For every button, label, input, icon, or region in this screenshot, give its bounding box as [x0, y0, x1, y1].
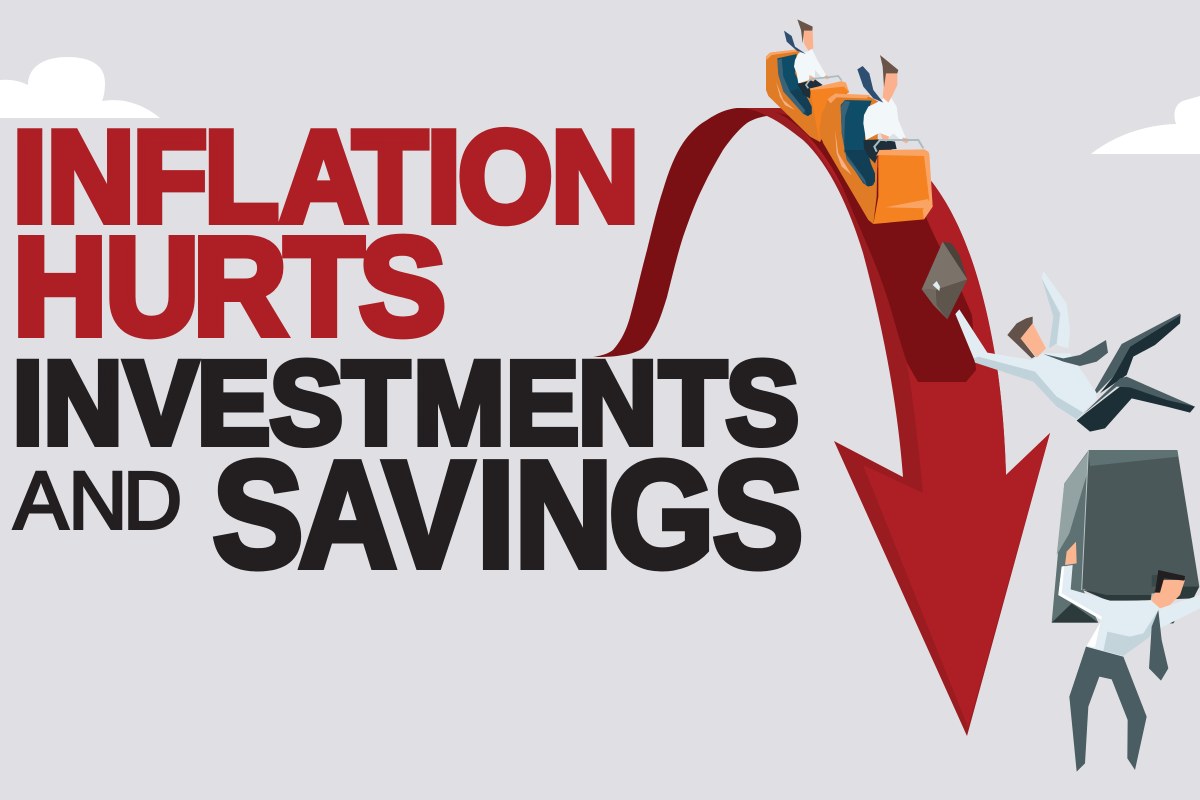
title line: INVESTMENTS: INVESTMENTS — [13, 338, 799, 469]
back car — [766, 49, 848, 142]
icon: briefcase — [922, 242, 967, 319]
title — [13, 105, 803, 599]
arrow bright face — [780, 108, 1050, 727]
arrow base shade — [737, 108, 1050, 736]
title line: SAVINGS: SAVINGS — [213, 431, 803, 599]
front rider — [857, 55, 923, 163]
front car — [819, 93, 878, 224]
man — [1058, 542, 1200, 772]
falling man — [955, 271, 1195, 432]
title line: INFLATION: INFLATION — [13, 105, 639, 249]
title line: AND: AND — [14, 456, 182, 546]
rollercoaster cars with riders — [766, 19, 933, 224]
cloud: top right — [1091, 96, 1200, 154]
front car panel — [873, 149, 933, 224]
title line: HURTS: HURTS — [13, 210, 446, 364]
back rider — [784, 19, 849, 142]
rollercoaster arrow — [593, 108, 1050, 736]
arrow rising ribbon — [593, 108, 767, 357]
cloud: top left — [0, 57, 160, 118]
boulder — [1052, 450, 1199, 623]
man carrying boulder — [1052, 450, 1200, 772]
falling figures — [922, 242, 1195, 432]
arrow dark track — [775, 112, 976, 382]
